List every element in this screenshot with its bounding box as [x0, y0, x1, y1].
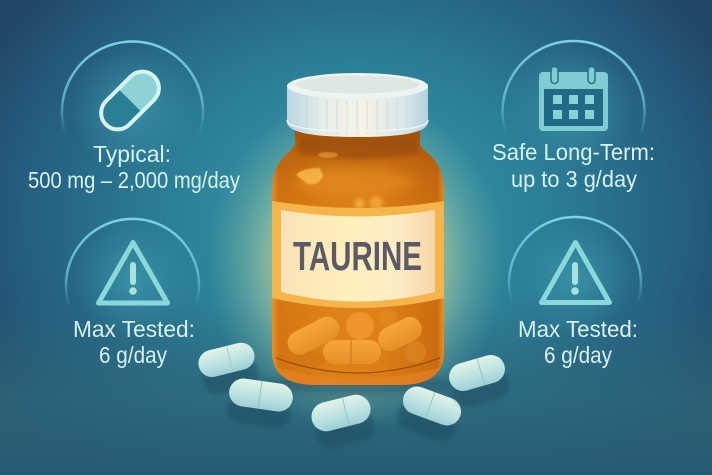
icon: calendar [539, 66, 608, 131]
label text: TAURINE [293, 233, 422, 279]
panel: max tested left [66, 219, 199, 368]
bottle cap [287, 73, 428, 137]
label [281, 210, 435, 302]
heading: safe long-term: Safe Long-Term: [492, 139, 655, 165]
loose capsules [196, 340, 513, 451]
icon: arc ring [62, 41, 203, 145]
bottle glass [270, 130, 446, 390]
capsule 5 [446, 352, 513, 411]
capsule 2 [225, 377, 295, 430]
capsule 3 [308, 392, 378, 451]
text: typical range: 500 mg – 2,000 mg/day [28, 167, 240, 193]
icon: warning triangle [542, 242, 610, 302]
text: safe dose: up to 3 g/day [511, 166, 637, 192]
heading: max tested: Max Tested: [518, 316, 638, 342]
icon: arc ring [509, 217, 641, 314]
icon: capsule [94, 65, 166, 136]
icon: arc ring [66, 219, 199, 317]
bottle [260, 73, 456, 393]
capsule 4 [393, 383, 465, 445]
panel: max tested right [509, 217, 641, 368]
text: max dose: 6 g/day [544, 342, 612, 368]
panel: typical dose [28, 41, 240, 193]
text: max dose: 6 g/day [99, 342, 167, 368]
panel: safe long-term [492, 41, 655, 192]
lower glass base [276, 358, 440, 373]
heading: typical: Typical: [93, 141, 171, 167]
capsule 1 [196, 340, 262, 397]
icon: warning triangle [98, 242, 168, 303]
heading: max tested: Max Tested: [73, 316, 195, 342]
icon: arc ring [502, 41, 645, 147]
pills inside bottle [288, 310, 426, 364]
label band [272, 201, 444, 308]
